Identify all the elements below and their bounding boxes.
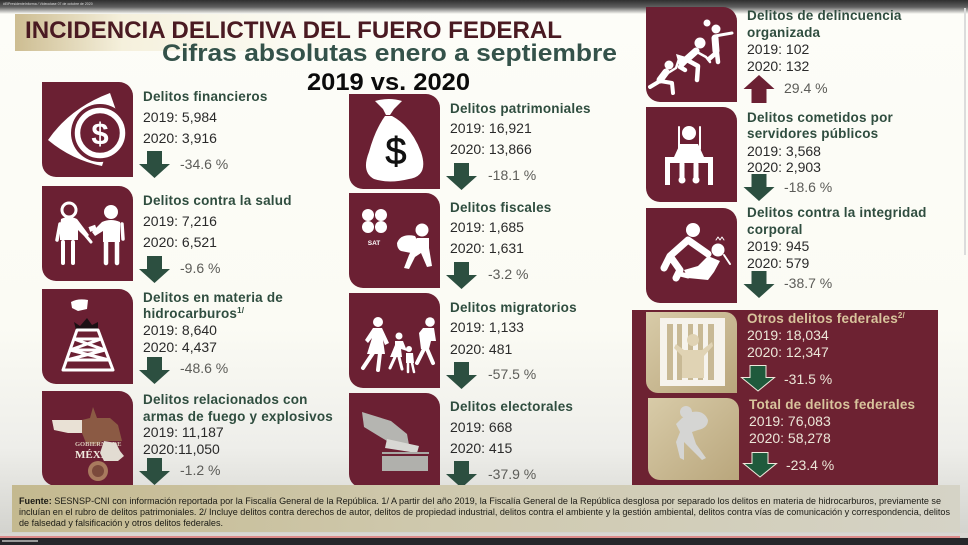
- change: -1.2 %: [180, 462, 220, 478]
- values: 2019: 1,685: [450, 219, 524, 235]
- arrow up: [744, 75, 774, 103]
- title: [747, 205, 927, 237]
- icon: oil tower: [42, 289, 133, 384]
- panel: delitos contra la salud: [42, 186, 292, 283]
- title: Delitos en materia de: [143, 290, 283, 305]
- panel: delitos electorales: [349, 393, 573, 488]
- values: 2019: 668: [450, 419, 512, 435]
- title: [747, 110, 894, 141]
- icon: pistol collage with logo: [42, 391, 133, 486]
- arrow down: [446, 461, 477, 488]
- icon: exchange between two people: [42, 186, 133, 281]
- icon: money bag: [349, 94, 440, 189]
- arrow down: [744, 271, 774, 298]
- values: 2019: 18,034: [747, 327, 829, 343]
- title: Delitos contra la salud: [143, 193, 292, 208]
- sub-panel: total de delitos federales: [648, 397, 915, 480]
- values: [143, 424, 224, 457]
- values: [143, 213, 217, 250]
- values: [450, 219, 524, 256]
- title: organizada: [747, 25, 821, 40]
- header band: [15, 14, 445, 51]
- title: Otros delitos federales: [747, 311, 898, 326]
- arrow down: [139, 458, 170, 485]
- values: 2020: 132: [747, 58, 809, 74]
- arrow down: [139, 357, 170, 384]
- icon: eye with coin: $: [91, 116, 109, 151]
- icon: thief: [648, 398, 739, 480]
- values: [143, 322, 217, 355]
- panel: delitos relacionados con armas de fuego y explosivos: [42, 391, 333, 486]
- icon: figures fleeing and climbing: [646, 7, 737, 102]
- change: 29.4 %: [784, 80, 828, 96]
- icon: SAT and thief: [349, 193, 440, 288]
- title: 2/: [898, 311, 906, 320]
- values: 2020: 481: [450, 341, 512, 357]
- arrow down: [446, 163, 477, 190]
- change: -38.7 %: [784, 275, 832, 291]
- values: [450, 120, 532, 157]
- title: Delitos contra la integridad: [747, 205, 927, 220]
- values: [747, 41, 809, 74]
- panel: delitos cometidos por servidores publicos: [646, 107, 894, 202]
- values: [450, 419, 512, 456]
- panel: delitos financieros: [42, 82, 268, 178]
- values: 2020: 4,437: [143, 339, 217, 355]
- arrow down: [446, 262, 477, 289]
- change: -9.6 %: [180, 260, 220, 276]
- values: 2019: 16,921: [450, 120, 532, 136]
- arrow down outlined: [742, 366, 774, 391]
- footnote: Fuente: SESNSP-CNI con información reportada por la Fiscalía General de la República. 1/ A partir del año 2019, la Fiscalía General de la República desglosa por separado los delitos en materia de hidrocarburos, previamente se: [19, 496, 941, 506]
- title: Delitos de delincuencia: [747, 8, 902, 23]
- icon: prison bars: [646, 312, 737, 393]
- values: 2020: 13,866: [450, 141, 532, 157]
- values: 2020: 1,631: [450, 240, 524, 256]
- icon: SAT and thief: SAT: [368, 240, 380, 247]
- values: [747, 238, 809, 271]
- title: Delitos electorales: [450, 399, 573, 414]
- panel: delitos de delincuencia organizada: [646, 7, 902, 103]
- icon: walking family: [349, 293, 440, 388]
- icon: money bag: $: [385, 131, 407, 173]
- values: 2020:11,050: [143, 441, 220, 457]
- title: servidores públicos: [747, 126, 878, 141]
- values: [749, 413, 831, 446]
- title: [143, 290, 283, 321]
- values: 2020: 415: [450, 440, 512, 456]
- title: [143, 392, 333, 424]
- values: 2019: 11,187: [143, 424, 224, 440]
- title: Delitos fiscales: [450, 200, 552, 215]
- values: 2019: 8,640: [143, 322, 217, 338]
- change: -18.1 %: [488, 167, 536, 183]
- title: Total de delitos federales: [749, 397, 915, 412]
- title: [747, 8, 902, 40]
- values: 2020: 6,521: [143, 234, 217, 250]
- title: INCIDENCIA DELICTIVA DEL FUERO FEDERAL: [25, 17, 562, 44]
- sub-panel: otros delitos federales: [646, 311, 906, 393]
- icon: pistol collage with logo: GOBIERNO DE: [75, 441, 121, 448]
- values: 2020: 2,903: [747, 159, 821, 175]
- footnote: de falsedad y falsificación y otros delitos federales.: [19, 518, 223, 528]
- title: hidrocarburos: [143, 306, 237, 321]
- values: [747, 143, 821, 175]
- values: 2019: 945: [747, 238, 809, 254]
- panel: delitos patrimoniales: [349, 94, 591, 190]
- values: [747, 327, 829, 360]
- title: Delitos cometidos por: [747, 110, 894, 125]
- change: -18.6 %: [784, 179, 832, 195]
- values: 2020: 3,916: [143, 130, 217, 146]
- arrow down outlined: [744, 452, 776, 477]
- icon: eye with coin: [42, 82, 133, 177]
- panel: delitos fiscales: [349, 193, 552, 289]
- footnote: incluían en el rubro de delitos patrimoniales. 2/ Incluye delitos contra derechos de autor, delitos de propiedad industrial, delitos contra el ambiente y la gestión ambiental, delitos contra vías de comunicación y correspondencia, delitos: [19, 507, 950, 517]
- title: Delitos relacionados con: [143, 392, 308, 407]
- change: -3.2 %: [488, 266, 528, 282]
- values: 2019: 3,568: [747, 143, 821, 159]
- arrow down: [744, 174, 774, 201]
- title: Delitos financieros: [143, 89, 268, 104]
- title: armas de fuego y explosivos: [143, 409, 333, 424]
- values: [450, 319, 524, 357]
- values: 2019: 7,216: [143, 213, 217, 229]
- comparison heading: 2019 vs. 2020: [307, 69, 470, 96]
- values: 2020: 579: [747, 255, 809, 271]
- title: Delitos patrimoniales: [450, 101, 591, 116]
- values: 2020: 12,347: [747, 344, 829, 360]
- values: 2019: 1,133: [450, 319, 524, 335]
- panel: delitos migratorios: [349, 293, 577, 389]
- values: 2019: 102: [747, 41, 809, 57]
- change: -23.4 %: [786, 457, 834, 473]
- title: Delitos migratorios: [450, 300, 577, 315]
- video top bar: [0, 0, 968, 14]
- icon: person at desk: [646, 107, 737, 202]
- change: -34.6 %: [180, 156, 228, 172]
- values: 2019: 5,984: [143, 109, 217, 125]
- icon: assault scene: [646, 208, 737, 303]
- change: -57.5 %: [488, 366, 536, 382]
- footnote: [12, 485, 960, 532]
- panel: totales: [632, 310, 938, 485]
- values: [143, 109, 217, 146]
- values: 2019: 76,083: [749, 413, 831, 429]
- title: 1/: [237, 306, 245, 315]
- video top bar: #ElPresidenteInforma / Videoclase 07 de octubre de 2020: [3, 2, 93, 6]
- values: 2020: 58,278: [749, 430, 831, 446]
- change: -48.6 %: [180, 360, 228, 376]
- arrow down: [139, 256, 170, 283]
- arrow down: [446, 362, 477, 389]
- subtitle: Cifras absolutas enero a septiembre: [162, 40, 617, 67]
- icon: pistol collage with logo: MÉXICO: [75, 449, 122, 461]
- title: corporal: [747, 222, 803, 237]
- panel background: [632, 310, 938, 485]
- change: -31.5 %: [784, 371, 832, 387]
- panel: delitos contra la integridad corporal: [646, 205, 927, 303]
- arrow down: [139, 151, 170, 178]
- icon: hand and ballot box: [349, 393, 440, 488]
- scrollbar edge: [964, 8, 966, 255]
- panel: delitos en materia de hidrocarburos: [42, 289, 283, 384]
- change: -37.9 %: [488, 466, 536, 482]
- video progress bar: [0, 533, 968, 545]
